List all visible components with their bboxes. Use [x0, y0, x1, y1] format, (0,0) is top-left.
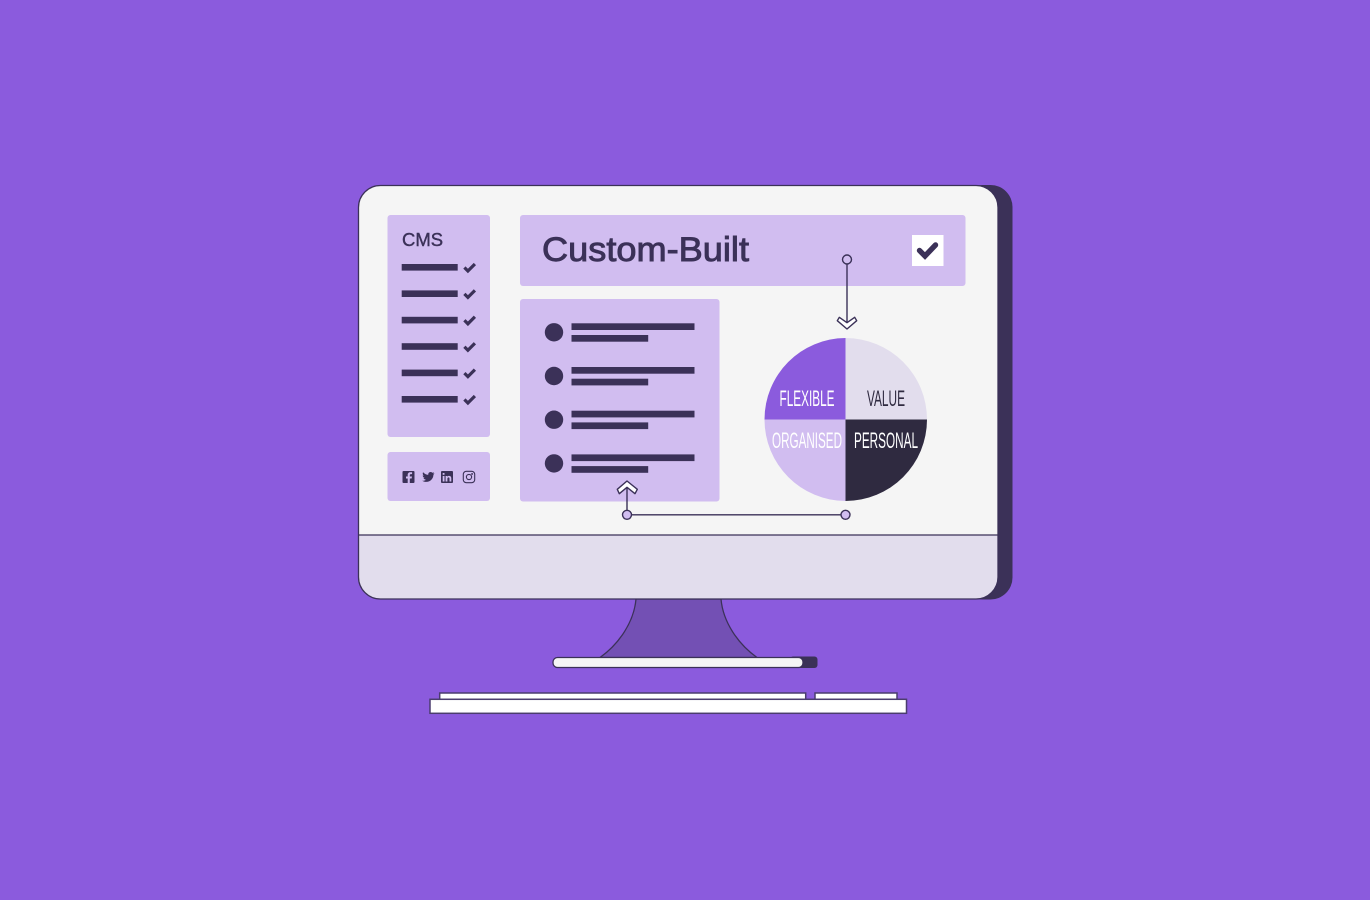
monitor chin: [358, 535, 998, 599]
icon: instagram: [463, 471, 475, 483]
checklist rows: [402, 264, 458, 403]
panel: social icons: [388, 452, 490, 501]
list item 3: [545, 410, 694, 429]
monitor: [358, 185, 1012, 600]
label: VALUE: VALUE: [867, 386, 905, 411]
panel: Custom-Built title: [520, 215, 966, 286]
heading: CMS: CMS: [402, 230, 443, 250]
title: Custom-Built: [542, 231, 750, 269]
monitor screen: [358, 186, 998, 535]
list item 1: [545, 323, 694, 342]
arrow: pie chart to list: [617, 481, 850, 519]
label: ORGANISED: ORGANISED: [772, 428, 842, 453]
icon: twitter: [422, 472, 434, 482]
list item 2: [545, 367, 694, 385]
panel: CMS checklist: [388, 215, 490, 437]
list item 4: [545, 454, 694, 473]
pie chart: [764, 338, 927, 501]
icon: facebook: [402, 471, 414, 483]
monitor side shadow: [960, 185, 1012, 600]
monitor stand: [553, 599, 818, 668]
icon: checkbox: [912, 235, 944, 266]
check marks: [464, 264, 475, 403]
arrow: title to pie chart: [837, 255, 857, 329]
label: PERSONAL: PERSONAL: [854, 428, 918, 453]
keyboard: [430, 693, 906, 713]
panel: bullet list: [520, 299, 720, 502]
label: FLEXIBLE: FLEXIBLE: [780, 386, 834, 411]
icon: linkedin: [441, 471, 453, 483]
